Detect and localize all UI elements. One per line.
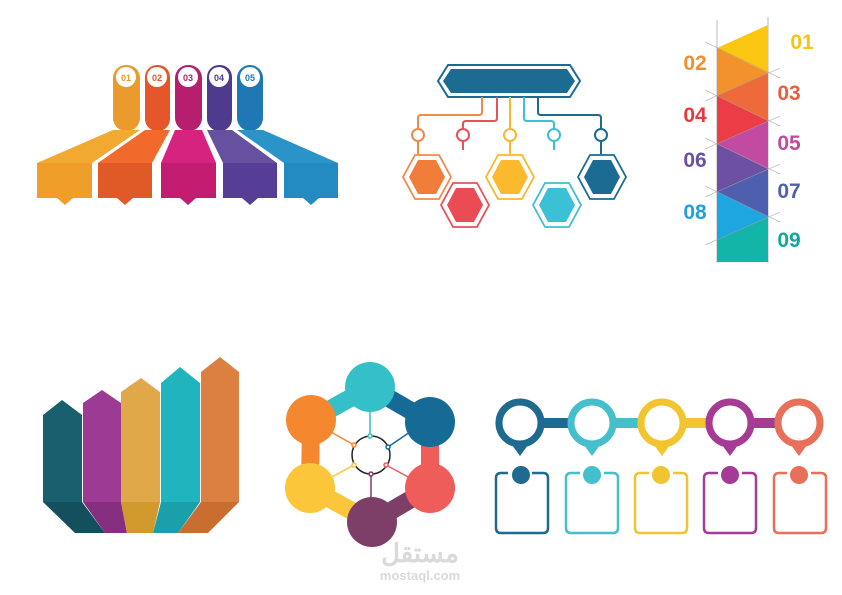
column 05: [237, 65, 338, 205]
watermark: mostaql.com: [380, 568, 460, 583]
box 5: [774, 466, 826, 533]
box 2: [566, 466, 618, 533]
bar orange: [178, 357, 239, 533]
banner: [438, 65, 580, 97]
spokes and center ring: [330, 410, 410, 500]
pin 1: [499, 402, 541, 456]
hexagon cyan: [533, 183, 581, 227]
panel: arrow bars: [43, 357, 239, 533]
box 4: [704, 466, 756, 533]
pin 5: [778, 402, 820, 456]
column 04: 04: [214, 73, 224, 83]
numbers: 08: [683, 201, 707, 224]
panel: circle pins with boxes: [496, 402, 826, 533]
watermark: [380, 538, 460, 583]
column 04: [207, 65, 277, 205]
hexagon blue: [578, 155, 626, 199]
watermark: مستقل: [381, 538, 459, 568]
column 05: 05: [245, 73, 255, 83]
numbers: 04: [683, 104, 707, 127]
bar purple: [83, 390, 127, 533]
diagonal fold lines: [705, 42, 780, 245]
numbers: 01: [790, 31, 814, 54]
numbers: 05: [777, 132, 801, 155]
column 01: [37, 65, 140, 205]
connectors: [540, 418, 779, 428]
bar gold: [121, 378, 160, 533]
bar teal: [43, 400, 105, 533]
hexagon orange: [403, 155, 451, 199]
connector lines: [412, 97, 607, 154]
panel: hexagonal circle network: [285, 362, 455, 547]
pin 4: [709, 402, 751, 456]
numbers: 02: [683, 52, 707, 75]
circles: [285, 362, 455, 547]
connectors: [310, 387, 430, 522]
column 01: 01: [121, 73, 131, 83]
panel: zigzag numbered ribbon: [683, 17, 814, 263]
numbers: 03: [777, 82, 801, 105]
pin 2: [571, 402, 613, 456]
pin 3: [641, 402, 683, 456]
numbers: 09: [777, 229, 801, 252]
column 02: [98, 65, 170, 205]
numbers: 07: [777, 180, 801, 203]
hexagon red: [441, 183, 489, 227]
column 03: 03: [183, 73, 193, 83]
box 1: [496, 466, 548, 533]
box 3: [635, 466, 687, 533]
panel: hexagon org chart: [403, 65, 626, 227]
panel: numbered ribbon columns: [37, 65, 338, 205]
ribbon bands: [717, 25, 768, 262]
numbers: [683, 31, 814, 252]
hexagon yellow: [486, 155, 534, 199]
column 02: 02: [152, 73, 162, 83]
numbers: 06: [683, 149, 707, 172]
bar turquoise: [153, 367, 200, 533]
column 03: [161, 65, 216, 205]
